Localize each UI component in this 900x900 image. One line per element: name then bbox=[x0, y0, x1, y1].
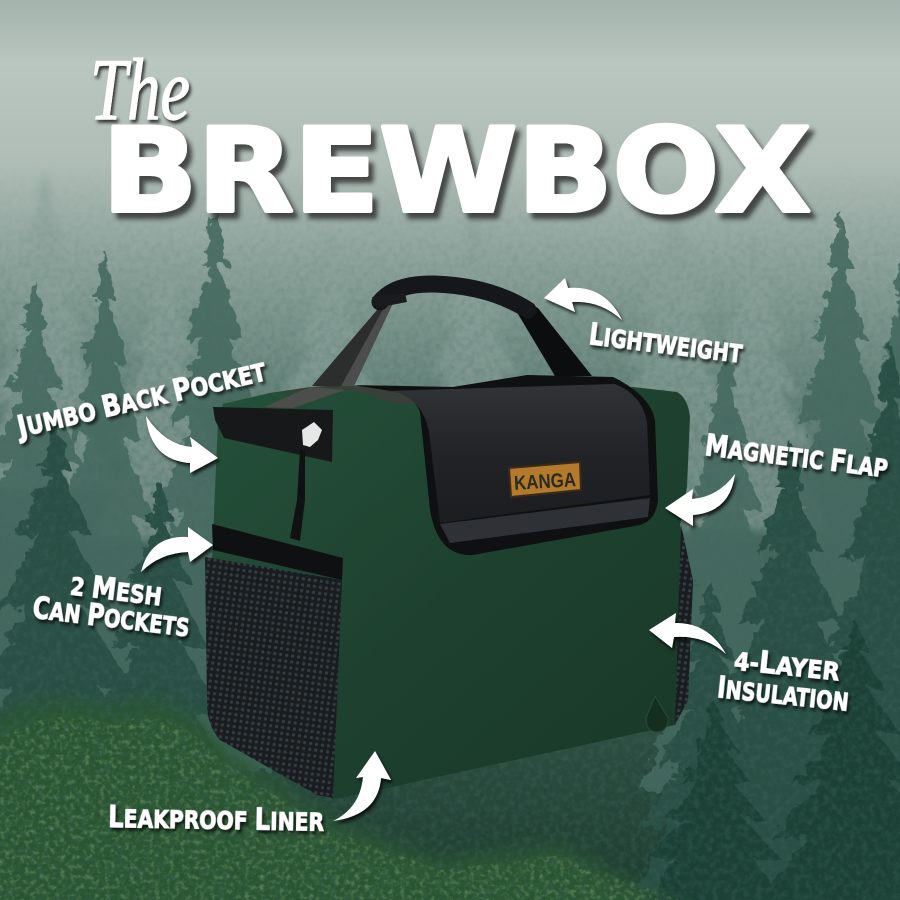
logo patch: KANGA bbox=[509, 462, 581, 497]
bag handle bbox=[312, 284, 592, 388]
label: LEAKPROOF LINER bbox=[108, 800, 324, 839]
callout: Lightweight bbox=[544, 278, 744, 371]
right side mesh bbox=[675, 525, 693, 725]
callout: 4-layer insulation bbox=[649, 613, 850, 719]
title bbox=[90, 42, 811, 239]
label line 1: 4-LAYER bbox=[732, 643, 842, 688]
magnetic flap bbox=[353, 375, 658, 555]
label: MAGNETIC FLAP bbox=[703, 428, 890, 485]
arrow bbox=[333, 751, 391, 821]
drop logo bbox=[646, 696, 668, 732]
mesh can pocket bbox=[205, 524, 343, 798]
zipper pull bbox=[290, 422, 322, 541]
callout: Leakproof liner bbox=[108, 751, 391, 839]
product: cooler bag bbox=[205, 284, 693, 799]
flap lower panel bbox=[440, 498, 650, 543]
logo patch: KANGA: KANGA bbox=[513, 469, 577, 495]
back pocket with zipper bbox=[213, 407, 333, 541]
arrow bbox=[665, 474, 735, 526]
callout: 2 mesh can pockets bbox=[31, 527, 213, 645]
bag top bbox=[223, 375, 630, 420]
title main: BREWBOX: BREWBOX bbox=[102, 104, 811, 239]
callout: Magnetic flap bbox=[665, 428, 890, 526]
arrow bbox=[649, 613, 726, 654]
callout: Jumbo back pocket bbox=[12, 354, 269, 473]
label line 2: INSULATION bbox=[716, 670, 850, 719]
bag body bbox=[212, 387, 693, 799]
arrow bbox=[146, 416, 218, 473]
label: JUMBO BACK POCKET bbox=[12, 354, 269, 445]
label line 1: 2 MESH bbox=[68, 568, 164, 614]
label line 2: CAN POCKETS bbox=[31, 591, 192, 645]
arrow bbox=[141, 527, 213, 572]
strap base bbox=[264, 387, 345, 408]
label: LIGHTWEIGHT bbox=[587, 317, 744, 371]
title script: The: The bbox=[90, 42, 190, 139]
arrow bbox=[544, 278, 622, 320]
